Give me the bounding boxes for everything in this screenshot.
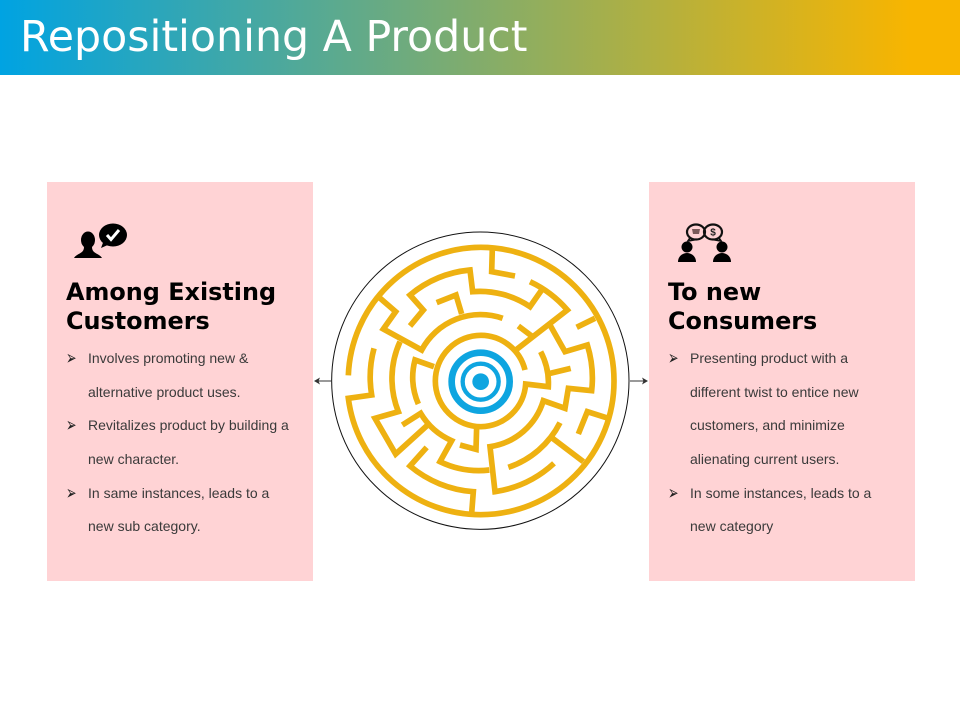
bullet list: ➢ <box>668 480 678 504</box>
bullet list: different twist to entice new <box>690 384 859 400</box>
bullet list: customers, and minimize <box>690 417 845 433</box>
heading <box>66 278 276 335</box>
bullet list: ➢ <box>668 345 678 369</box>
panel: among existing customers <box>47 182 313 581</box>
heading: Among Existing <box>66 278 276 306</box>
target <box>452 353 510 411</box>
arrow: right <box>630 378 648 384</box>
icon: two people with speech bubbles: $ <box>710 228 716 238</box>
heading: Customers <box>66 307 210 335</box>
bullet list: new character. <box>88 451 179 467</box>
heading: Consumers <box>668 307 817 335</box>
bullet list: new category <box>690 518 773 534</box>
bullet list <box>66 345 289 534</box>
maze diagram <box>331 232 630 530</box>
bullet list: Involves promoting new & <box>88 350 248 366</box>
heading <box>668 278 817 335</box>
bullet list: In some instances, leads to a <box>690 485 871 501</box>
bullet list: In same instances, leads to a <box>88 485 269 501</box>
panel: to new consumers <box>649 182 915 581</box>
bullet list: Presenting product with a <box>690 350 848 366</box>
maze walls <box>348 247 614 515</box>
bullet list: ➢ <box>66 412 76 436</box>
icon: person with check speech bubble <box>74 224 127 258</box>
bullet list: ➢ <box>66 345 76 369</box>
heading: To new <box>668 278 761 306</box>
header banner <box>0 0 960 75</box>
title: Repositioning A Product <box>20 12 528 62</box>
icon: two people with speech bubbles <box>678 223 731 262</box>
arrow: left <box>314 378 332 384</box>
outer circle <box>332 232 629 529</box>
bullet list <box>668 345 872 534</box>
bullet list: alienating current users. <box>690 451 839 467</box>
bullet list: Revitalizes product by building a <box>88 417 289 433</box>
bullet list: alternative product uses. <box>88 384 241 400</box>
bullet list: new sub category. <box>88 518 201 534</box>
bullet list: ➢ <box>66 480 76 504</box>
